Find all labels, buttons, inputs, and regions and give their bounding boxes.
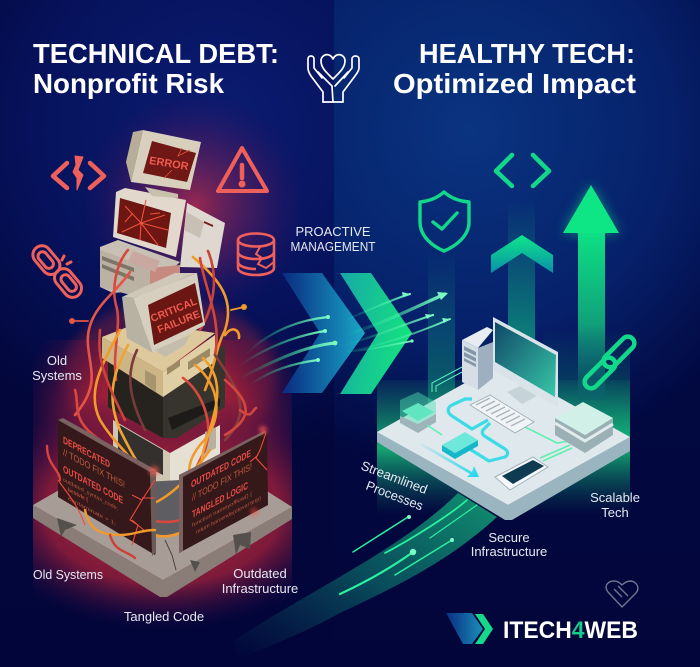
code panel: left: DEPRECATED: [63, 435, 110, 471]
monitor: critical failure: CRITICAL: [149, 295, 199, 325]
label: outdated infrastructure: Outdated: [233, 566, 287, 581]
label: outdated infrastructure: [222, 566, 298, 596]
left stack: [400, 403, 436, 433]
chevron: blue: [282, 273, 365, 393]
title: technical debt: TECHNICAL DEBT:: [33, 38, 279, 69]
black box: [108, 345, 225, 438]
lower white tower: [113, 420, 220, 535]
title: healthy tech: Optimized Impact: [393, 68, 636, 99]
healthy tech platform: [377, 317, 630, 520]
monitor: error: [126, 130, 201, 198]
label: outdated infrastructure: Infrastructure: [222, 581, 298, 596]
monitor: error: ERROR: [148, 155, 189, 173]
icon: small heart: [606, 581, 638, 607]
monitor: cracked screen: [113, 188, 186, 272]
icon: warning triangle: [218, 148, 267, 191]
label: secure infrastructure: [471, 530, 547, 559]
chevron up: [491, 235, 553, 273]
label: secure infrastructure: Infrastructure: [471, 544, 547, 559]
icon: hands holding heart: [308, 55, 359, 102]
code panel: left: // TODO FIX THIS!: [63, 448, 125, 491]
icon: broken chain: [29, 242, 85, 301]
code panel: left: contaminate + 1;: [68, 496, 116, 528]
server right: [555, 402, 613, 453]
logo wordmark: ITECH4WEB: [503, 617, 638, 644]
code panel: right: function nameyofflow() {: [192, 491, 252, 529]
beams: [377, 200, 630, 515]
label: tangled code: Tangled Code: [124, 609, 204, 624]
label: old systems upper: Old: [47, 353, 67, 368]
cables lower: [75, 330, 256, 536]
label: scalable tech: [590, 490, 640, 520]
code panel: right: [179, 426, 268, 553]
beige box: [102, 322, 215, 397]
monitor: [493, 317, 558, 407]
phone: [495, 457, 548, 490]
speed lines: [240, 294, 450, 385]
monitor: critical failure: FAILURE: [156, 308, 202, 336]
cyan arrow: [420, 443, 479, 477]
label: streamlined processes: [359, 458, 430, 513]
circuit green: [427, 425, 572, 461]
code panel: left: OUTDATED CODE: [63, 464, 123, 507]
code panel: right: // TODO FIX THIS!: [192, 462, 252, 504]
title: technical debt: [33, 38, 279, 99]
keyboard: [470, 395, 534, 433]
cables upper: [69, 250, 247, 415]
logo mark: [446, 613, 493, 644]
icon: broken code: [53, 156, 104, 190]
icon: shield check: [420, 192, 469, 251]
label: proactive management: PROACTIVE: [295, 224, 371, 239]
tower under cracked monitor: [100, 240, 180, 300]
code panel: left: bestvle {: [68, 487, 89, 504]
label: scalable tech: Scalable: [590, 490, 640, 505]
label: streamlined processes: Processes: [364, 478, 426, 513]
translucent cube: [400, 392, 436, 428]
icon: chain link: [582, 334, 637, 391]
code panel: left: [47, 418, 159, 558]
cracked platform: [33, 455, 292, 597]
tower pc: [462, 327, 493, 390]
title: technical debt: Nonprofit Risk: [33, 68, 224, 99]
logo: [446, 613, 638, 644]
arrow tips: [316, 292, 450, 362]
code panel: right: return barcende(eteval terp): [196, 496, 261, 536]
label: scalable tech: Tech: [601, 505, 629, 520]
label: old systems upper: [32, 353, 82, 383]
monitor: critical failure: [122, 273, 205, 357]
code panel: left: outdated_syntax_code;: [63, 477, 118, 512]
label: proactive management: MANAGEMENT: [290, 239, 376, 254]
computer tower stack: [69, 130, 256, 536]
icon: cracked database: [238, 234, 274, 275]
growth arrow: [563, 185, 619, 400]
swoosh: [235, 493, 497, 660]
teal device: [442, 432, 478, 459]
icon: code brackets: [496, 155, 549, 186]
white box right: [180, 203, 225, 268]
circuit cyan: [448, 399, 508, 461]
code panel: right: OUTDATED CODE: [191, 448, 251, 491]
label: streamlined processes: Streamlined: [359, 458, 430, 497]
title: healthy tech: HEALTHY TECH:: [419, 38, 635, 69]
title: healthy tech: [393, 38, 636, 99]
label: old systems lower: Old Systems: [33, 567, 103, 582]
label: old systems upper: Systems: [32, 368, 82, 383]
label: secure infrastructure: Secure: [488, 530, 530, 545]
code panel: right: TANGLED LOGIC: [192, 480, 248, 521]
green glow loop: [432, 367, 462, 392]
label: proactive management: [290, 224, 376, 254]
chevron: green: [340, 273, 412, 394]
